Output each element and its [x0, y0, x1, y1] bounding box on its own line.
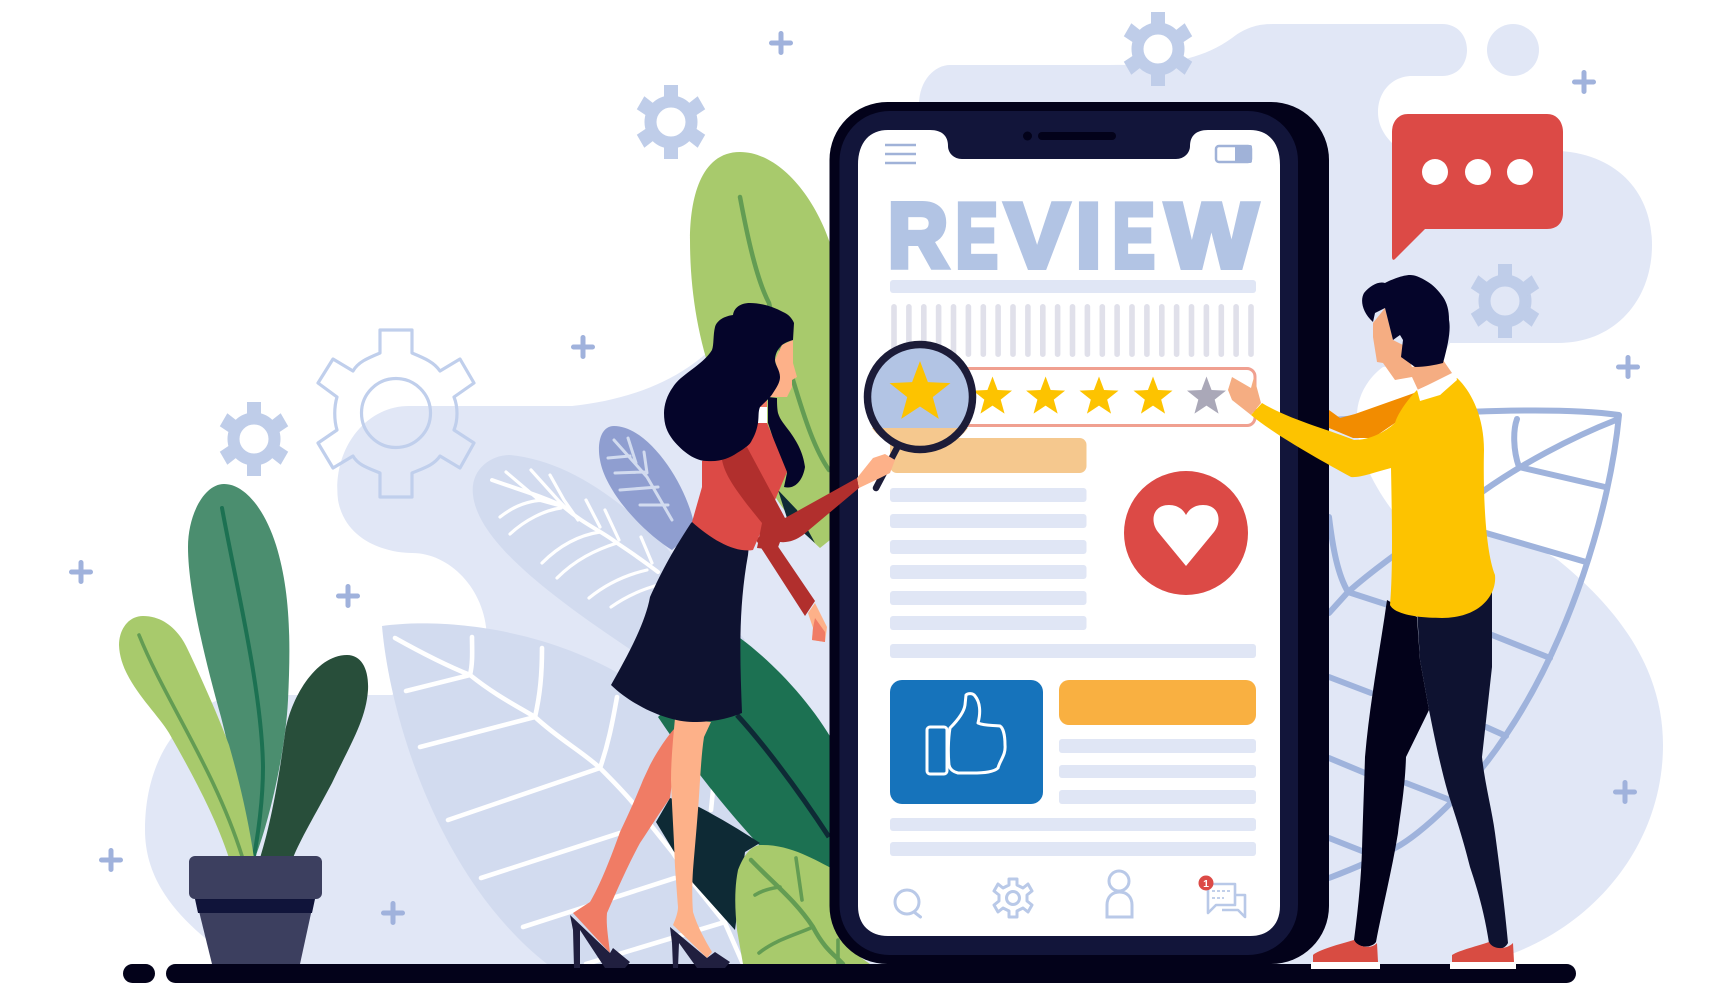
nav icon: profile [1107, 871, 1132, 917]
green leaf: dark [658, 638, 835, 880]
woman: face [768, 340, 797, 397]
gear icon: left [219, 402, 289, 476]
man: hair [1362, 275, 1450, 367]
title: REVIEW: R [888, 186, 948, 287]
man: near leg [1417, 590, 1508, 949]
woman: front leg [671, 718, 712, 958]
purple leaf [599, 426, 695, 550]
woman: hair [664, 303, 794, 461]
thumbs up card [890, 680, 1043, 804]
gear icon: right [1470, 264, 1540, 338]
outline leaf on the right [1329, 410, 1619, 878]
man: collar [1417, 373, 1457, 401]
man: neck and face [1373, 308, 1452, 390]
background blob: left side [145, 347, 835, 964]
title: REVIEW: E [1113, 186, 1155, 287]
vertical bars row [891, 304, 1254, 357]
phone outer body [830, 102, 1329, 964]
title: REVIEW: E [956, 186, 998, 287]
speaker and camera [1023, 132, 1116, 140]
woman: lowered hand [808, 603, 827, 642]
woman: back hair [768, 397, 805, 488]
pale leaf: upper [473, 455, 745, 690]
rating stars [973, 376, 1226, 414]
phone screen [858, 130, 1280, 936]
magnifying glass [867, 344, 973, 488]
man: shoes [1311, 940, 1516, 969]
plant leaf: mid green [188, 484, 289, 860]
woman: blouse [692, 423, 787, 550]
woman: lowered arm [756, 525, 815, 616]
notification count: 1 [1203, 878, 1209, 890]
woman: blouse shadow and sleeve [722, 447, 859, 550]
ground line [123, 964, 1576, 983]
man: sweater [1251, 378, 1495, 618]
gear icon: top centre-left [636, 85, 706, 159]
menu icon [885, 145, 916, 163]
heart badge [1124, 471, 1248, 595]
speech bubble [1392, 114, 1563, 260]
man: hand [1228, 377, 1261, 415]
nav icon: messages [1198, 876, 1245, 917]
woman: shoes [570, 915, 730, 968]
man [1228, 275, 1516, 969]
background circle: top right [1487, 24, 1539, 76]
woman [570, 303, 973, 968]
text lines beside heart [890, 488, 1256, 658]
orange button [1059, 680, 1256, 725]
dark teal leaf [656, 798, 760, 930]
plant pot [189, 856, 322, 964]
man: far leg [1354, 600, 1429, 947]
text lines below button [890, 739, 1256, 856]
dark teal sliver behind arm [778, 490, 815, 543]
toggle icon [1216, 145, 1252, 163]
woman: raised hand [857, 454, 895, 488]
man: shirt shadow [1329, 392, 1417, 438]
title: REVIEW: I [1076, 186, 1101, 287]
phone inner bezel [840, 111, 1298, 955]
woman: skirt [611, 510, 750, 722]
green leaf: small lower [735, 845, 870, 964]
heading bar [890, 280, 1256, 293]
woman: neck [758, 396, 767, 423]
smartphone [830, 102, 1329, 964]
nav icon: settings [994, 879, 1032, 917]
background blob: upper right and right side [850, 24, 1663, 964]
pale leaf: large lower [382, 623, 770, 964]
outline gear [318, 330, 474, 497]
woman: back leg [573, 722, 680, 953]
green leaf: tall light [690, 152, 835, 548]
plant leaf: light green [119, 616, 254, 858]
title: REVIEW: W [1166, 186, 1257, 287]
gear icon: top right [1123, 12, 1193, 86]
potted plant [119, 484, 368, 964]
title: REVIEW: V [1006, 186, 1069, 287]
rating box [940, 368, 1255, 426]
nav icon: search [895, 890, 920, 917]
plant leaf: dark green [260, 655, 368, 858]
peach label bar [890, 438, 1086, 473]
